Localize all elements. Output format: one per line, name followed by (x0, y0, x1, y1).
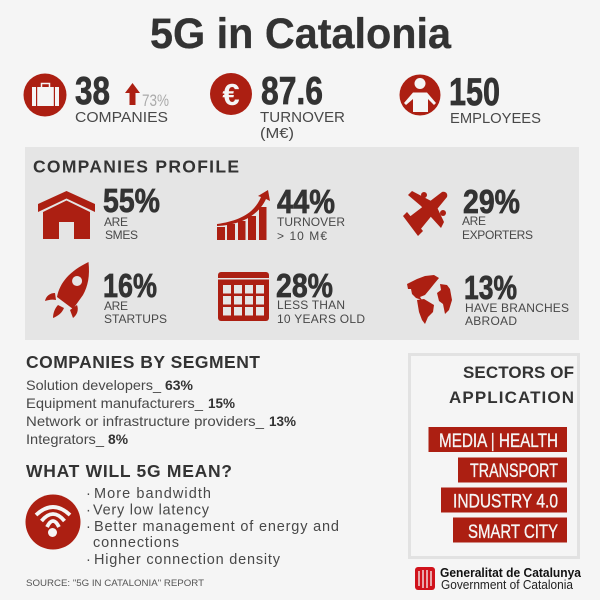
icon: rocket (45, 262, 89, 318)
heading: what will 5G mean: WHAT WILL 5G MEAN? (26, 461, 232, 481)
benefits list: More bandwidth (94, 486, 211, 502)
label: ABROAD (465, 314, 517, 328)
stat: companies (24, 70, 169, 126)
number: 38: 38 (75, 70, 110, 113)
number: 150: 150 (449, 71, 500, 114)
arrow: growth (125, 83, 140, 105)
label: turnover: TURNOVER (260, 109, 345, 126)
segment list: Integrators_ (26, 431, 104, 447)
logo: Generalitat de Catalunya (415, 565, 582, 592)
wordmark: Generalitat de Catalunya (440, 565, 582, 580)
tag: transport (458, 458, 567, 482)
tag: smart city: SMART CITY (468, 522, 558, 543)
benefits list: · (86, 519, 91, 535)
value: 13% (464, 269, 517, 306)
label: TURNOVER (277, 215, 345, 229)
segment list: 13% (269, 413, 297, 429)
icon: globe (407, 275, 452, 324)
label: STARTUPS (104, 312, 167, 326)
segment list: 8% (108, 431, 129, 447)
panel: companies profile (25, 147, 579, 340)
segment list: 63% (165, 377, 194, 393)
value: 28% (276, 267, 333, 304)
icon: briefcase (24, 74, 66, 116)
heading: companies profile: COMPANIES PROFILE (33, 156, 239, 176)
heading: companies by segment: COMPANIES BY SEGMENT (26, 352, 260, 372)
item: exporters (403, 183, 533, 242)
segment list: Equipment manufacturers_ (26, 395, 203, 411)
tag: media health (428, 427, 567, 452)
icon: plane (403, 191, 447, 236)
value: 29% (463, 183, 520, 220)
icon: wifi (26, 494, 80, 550)
benefits list: Higher connection density (94, 552, 281, 568)
segment list: 15% (208, 395, 236, 411)
wordmark (440, 565, 582, 592)
growth value: 73% (142, 91, 169, 110)
item: branches abroad (407, 269, 569, 328)
title: 5G in Catalonia (150, 10, 452, 58)
item: young companies (218, 267, 365, 326)
segment list: Network or infrastructure providers_ (26, 413, 264, 429)
label: LESS THAN (277, 298, 345, 312)
label: EXPORTERS (462, 228, 533, 242)
panel: sectors of application (410, 354, 578, 558)
tag: media health: MEDIA | HEALTH (439, 431, 558, 452)
value: 55% (103, 182, 160, 219)
benefits list: Very low latency (93, 502, 210, 518)
label: companies: COMPANIES (75, 109, 168, 126)
label: ARE (104, 299, 128, 313)
stat: employees (400, 71, 541, 127)
icon: person (400, 74, 440, 116)
label: SMES (105, 228, 138, 242)
icon: shield (415, 567, 435, 590)
heading: sectors of application (449, 363, 574, 407)
segment list: Solution developers_ (26, 377, 161, 393)
label: 10 YEARS OLD (277, 312, 365, 326)
benefits list: · (86, 502, 91, 518)
heading: sectors of application: APPLICATION (449, 388, 574, 407)
icon: calendar (218, 272, 269, 321)
source note: SOURCE: "5G IN CATALONIA" REPORT (26, 578, 204, 589)
value: 16% (103, 267, 157, 304)
wordmark: Government of Catalonia (441, 577, 574, 592)
benefits list (86, 486, 339, 568)
icon: euro: € (222, 77, 240, 112)
number: 87.6: 87.6 (261, 70, 323, 113)
heading: sectors of application: SECTORS OF (463, 363, 574, 382)
tag: transport: TRANSPORT (470, 461, 558, 482)
benefits list: Better management of energy and (94, 519, 339, 535)
section: companies by segment (26, 352, 297, 447)
label: ARE (104, 215, 128, 229)
benefits list: · (86, 486, 91, 502)
segment list (26, 377, 297, 447)
icon: rising chart (217, 190, 270, 240)
label: unit: (M€) (260, 125, 294, 142)
tag: industry 4.0 (441, 488, 567, 512)
item: SMEs (38, 182, 160, 242)
label: ARE (462, 214, 486, 228)
label: employees: EMPLOYEES (450, 110, 541, 127)
section: what will 5G mean (26, 461, 339, 568)
item: startups (45, 262, 167, 326)
value: 44% (277, 183, 335, 220)
benefits list: connections (93, 535, 179, 551)
tag: smart city (453, 518, 567, 543)
label: HAVE BRANCHES (465, 301, 569, 315)
icon: house (38, 191, 95, 239)
tag: industry 4.0: INDUSTRY 4.0 (453, 492, 558, 512)
item: turnover over 10 M€ (217, 183, 345, 243)
stat: turnover (210, 70, 345, 142)
benefits list: · (86, 552, 91, 568)
label: > 10 M€ (277, 229, 327, 243)
